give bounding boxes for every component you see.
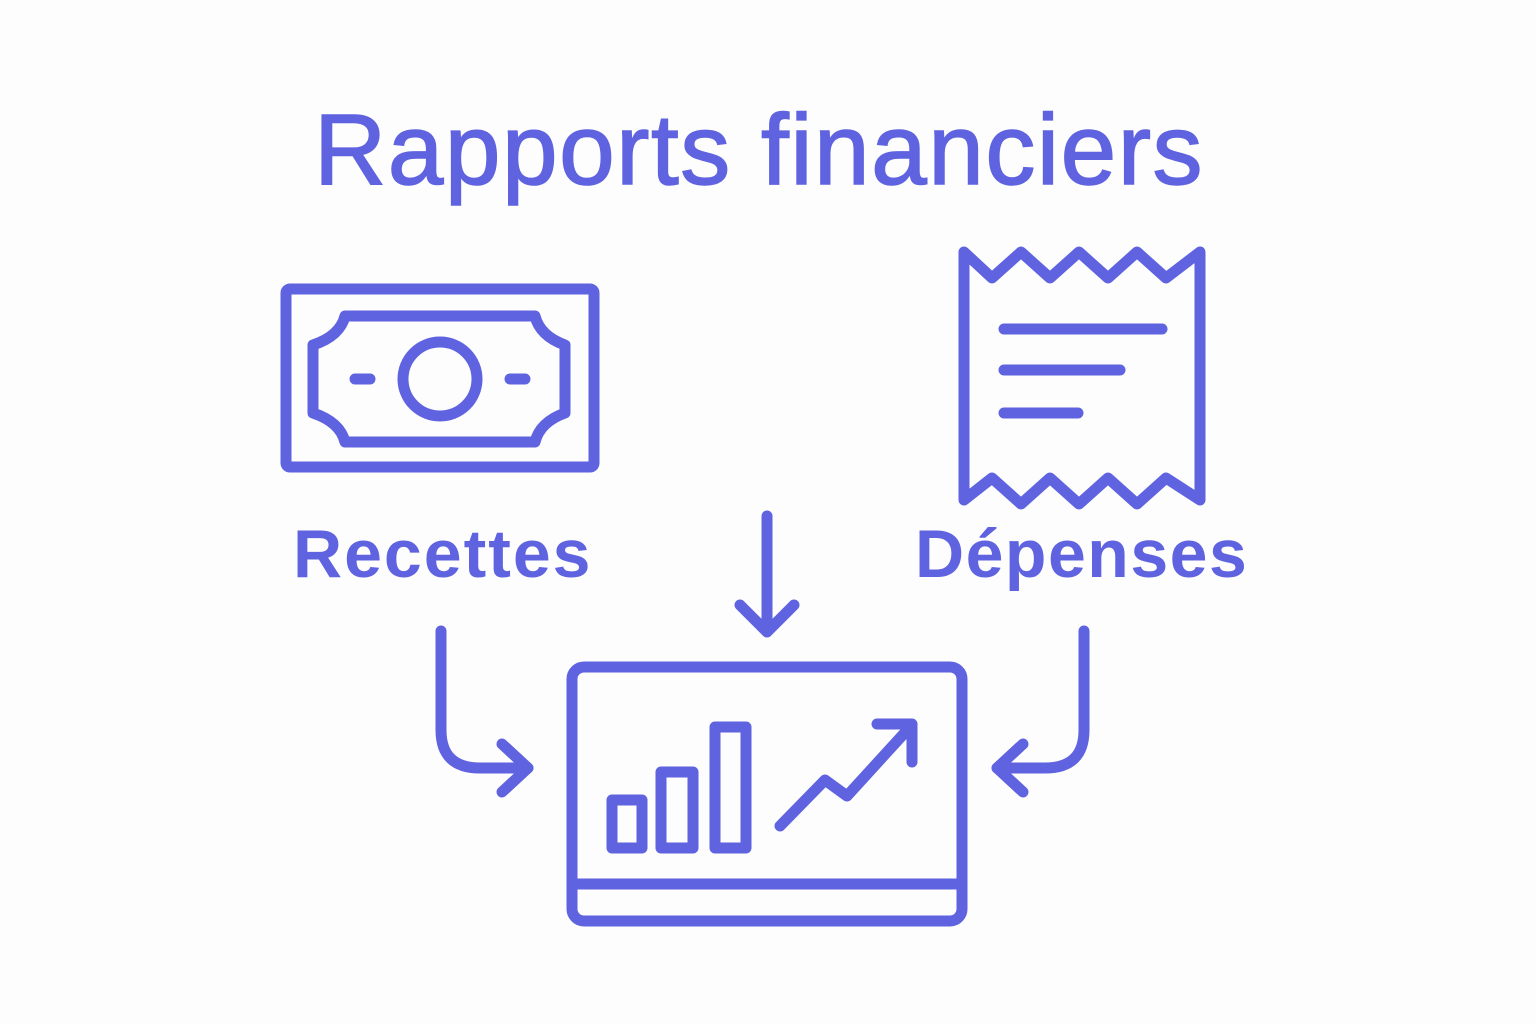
arrow: center down [740, 516, 794, 632]
icon: receipt [964, 252, 1200, 504]
icon: banknote [286, 289, 594, 467]
title: Rapports financiers [314, 94, 1204, 206]
arrow: right [997, 631, 1084, 792]
label: Dépenses: Dépenses [915, 516, 1248, 592]
icon: chart screen [572, 667, 962, 921]
label: Recettes: Recettes [293, 516, 592, 592]
arrow: left [441, 631, 528, 792]
